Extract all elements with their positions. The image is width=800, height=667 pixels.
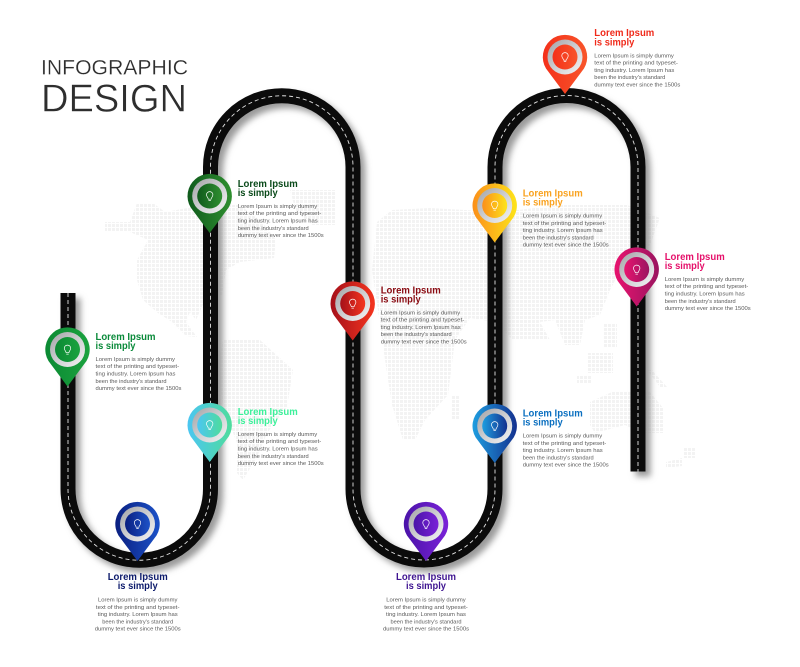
text block 7: blue [523, 409, 609, 469]
text block 10: orange red: Lorem Ipsum [594, 28, 654, 39]
text block 10: orange red: ting industry. Lorem Ipsum has [594, 68, 675, 74]
text block 4: aqua: been the industry's standard [238, 454, 309, 460]
title: INFOGRAPHIC [41, 55, 188, 79]
pin 2: navy [115, 502, 160, 561]
text block 9: pink: Lorem Ipsum is simply dummy [665, 277, 744, 283]
text block 6: purple: text of the printing and typeset- [384, 605, 468, 611]
text block 7: blue: Lorem Ipsum [523, 409, 583, 420]
winding road [68, 95, 643, 565]
text block 10: orange red: been the industry's standard [594, 75, 665, 81]
text block 2: navy: dummy text ever since the 1500s [95, 627, 181, 633]
text block 1: green: text of the printing and typeset- [96, 364, 179, 370]
text block 5: red [381, 285, 467, 345]
pin 5: red [330, 281, 375, 340]
text block 1: green: been the industry's standard [96, 379, 166, 385]
pin 4: aqua [188, 403, 232, 462]
text block 8: yellow: text of the printing and typeset- [523, 221, 606, 227]
text block 5: red: text of the printing and typeset- [381, 317, 464, 323]
text block 9: pink: dummy text ever since the 1500s [665, 306, 751, 312]
text block 8: yellow: ting industry. Lorem Ipsum has [523, 228, 603, 234]
text block 8: yellow: Lorem Ipsum is simply dummy [523, 214, 602, 220]
text block 3: dark green: Lorem Ipsum [238, 179, 298, 190]
text block 1: green: Lorem Ipsum [96, 332, 156, 343]
text block 3: dark green: dummy text ever since the 1500s [238, 233, 324, 239]
text block 8: yellow [523, 189, 609, 249]
text block 2: navy [95, 572, 181, 633]
text block 4: aqua: ting industry. Lorem Ipsum has [238, 446, 318, 452]
text block 6: purple: ting industry. Lorem Ipsum has [386, 612, 466, 618]
text block 10: orange red: dummy text ever since the 1500s [594, 82, 681, 88]
text block 4: aqua: dummy text ever since the 1500s [238, 461, 324, 467]
text block 1: green [96, 332, 182, 392]
text block 6: purple: been the industry's standard [390, 620, 462, 626]
pin 7: blue [472, 404, 517, 463]
text block 4: aqua [238, 407, 324, 467]
text block 10: orange red: is simply [594, 38, 635, 48]
pin 9: pink [614, 247, 659, 306]
text block 5: red: dummy text ever since the 1500s [381, 339, 467, 345]
pin 1: green [45, 327, 90, 386]
pin 3: dark green [188, 174, 232, 233]
title [41, 55, 188, 120]
text block 1: green: ting industry. Lorem Ipsum has [96, 372, 176, 378]
text block 2: navy: Lorem Ipsum is simply dummy [98, 598, 178, 604]
text block 9: pink: text of the printing and typeset- [665, 284, 748, 290]
text block 2: navy: Lorem Ipsum [108, 572, 168, 583]
text block 3: dark green [238, 179, 324, 239]
text block 7: blue: ting industry. Lorem Ipsum has [523, 448, 603, 454]
pin 6: purple [404, 502, 448, 561]
text block 3: dark green: ting industry. Lorem Ipsum has [238, 218, 318, 224]
text block 1: green: dummy text ever since the 1500s [96, 386, 182, 392]
text block 6: purple [383, 572, 469, 633]
text block 5: red: been the industry's standard [381, 332, 452, 338]
text block 9: pink [665, 252, 751, 312]
text block 4: aqua: is simply [238, 416, 278, 427]
text block 5: red: is simply [381, 294, 421, 305]
text block 2: navy: been the industry's standard [102, 620, 173, 626]
text block 6: purple: Lorem Ipsum is simply dummy [386, 598, 466, 604]
text block 4: aqua: Lorem Ipsum is simply dummy [238, 432, 317, 438]
text block 3: dark green: been the industry's standard [238, 226, 309, 232]
text block 3: dark green: is simply [238, 188, 278, 199]
text block 7: blue: dummy text ever since the 1500s [523, 463, 609, 469]
text block 3: dark green: text of the printing and typeset- [238, 211, 321, 217]
text block 8: yellow: is simply [523, 198, 563, 209]
text block 10: orange red: Lorem Ipsum is simply dummy [594, 53, 674, 59]
text block 2: navy: ting industry. Lorem Ipsum has [98, 612, 178, 618]
text block 7: blue: Lorem Ipsum is simply dummy [523, 434, 602, 440]
pin 10: orange red [543, 35, 587, 94]
text block 8: yellow: been the industry's standard [523, 235, 594, 241]
text block 10: orange red: text of the printing and typeset- [594, 60, 678, 66]
text block 9: pink: been the industry's standard [665, 299, 736, 305]
text block 8: yellow: dummy text ever since the 1500s [523, 243, 609, 249]
title: DESIGN [41, 77, 187, 120]
text block 1: green: is simply [96, 341, 136, 352]
text block 9: pink: Lorem Ipsum [665, 252, 725, 263]
text block 2: navy: is simply [118, 581, 158, 592]
text block 6: purple: dummy text ever since the 1500s [383, 627, 469, 633]
text block 7: blue: been the industry's standard [523, 456, 594, 462]
pin 8: yellow [472, 183, 517, 242]
text block 5: red: Lorem Ipsum is simply dummy [381, 310, 460, 316]
text block 5: red: Lorem Ipsum [381, 285, 441, 296]
text block 3: dark green: Lorem Ipsum is simply dummy [238, 204, 317, 210]
text block 8: yellow: Lorem Ipsum [523, 189, 583, 200]
text block 4: aqua: text of the printing and typeset- [238, 439, 321, 445]
text block 10: orange red [594, 28, 681, 88]
text block 1: green: Lorem Ipsum is simply dummy [96, 357, 175, 363]
text block 6: purple: Lorem Ipsum [396, 572, 456, 583]
text block 7: blue: text of the printing and typeset- [523, 441, 606, 447]
text block 9: pink: ting industry. Lorem Ipsum has [665, 292, 745, 298]
text block 7: blue: is simply [523, 418, 563, 429]
text block 2: navy: text of the printing and typeset- [96, 605, 180, 611]
dotted world map [105, 190, 696, 480]
text block 5: red: ting industry. Lorem Ipsum has [381, 325, 461, 331]
text block 6: purple: is simply [406, 581, 446, 592]
text block 4: aqua: Lorem Ipsum [238, 407, 298, 418]
text block 9: pink: is simply [665, 261, 705, 272]
